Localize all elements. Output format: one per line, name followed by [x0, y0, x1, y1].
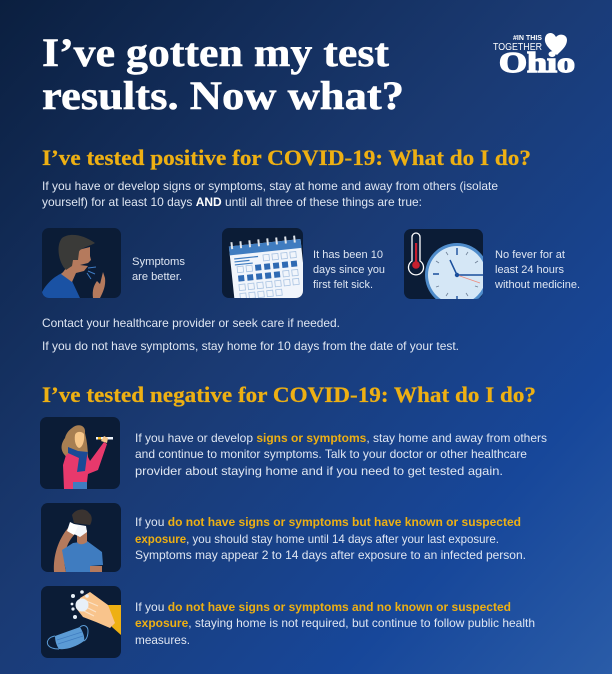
icon: person coughing	[42, 228, 121, 298]
text: negative with symptoms: provider about staying home and if you need to get tested again.	[135, 464, 503, 478]
title: I’ve gotten my test	[42, 30, 390, 75]
icon: man with mask	[41, 503, 121, 572]
intro paragraph	[42, 179, 498, 209]
text: negative no exposure: If you do not have signs or symptoms and no known or suspected	[135, 600, 511, 614]
icon: hand washing and mask	[41, 586, 121, 658]
label: ten days: days since you	[313, 264, 385, 276]
text: negative with exposure	[135, 515, 526, 562]
heading: tested positive: I’ve tested positive for COVID-19: What do I do?	[42, 145, 531, 170]
care note: Contact your healthcare provider or seek care if needed.	[42, 316, 340, 330]
no symptoms note: If you do not have symptoms, stay home for 10 days from the date of your test.	[42, 339, 459, 353]
label: symptoms better: Symptoms	[132, 256, 185, 268]
label: no fever: least 24 hours	[495, 264, 564, 276]
text: negative with symptoms	[135, 431, 547, 478]
text: negative no exposure: exposure, staying home is not required, but continue to follow public health	[135, 616, 535, 630]
intro paragraph: yourself) for at least 10 days AND until all three of these things are true:	[42, 195, 422, 209]
label: ten days	[313, 249, 385, 291]
text: negative with symptoms: and continue to monitor symptoms. Talk to your doctor or other healthcare	[135, 447, 527, 461]
icon: thermometer and clock	[404, 229, 483, 299]
text: negative with exposure: Symptoms may appear 2 to 14 days after exposure to an infected person.	[135, 548, 526, 562]
intro paragraph: If you have or develop signs or symptoms, stay at home and away from others (isolate	[42, 179, 498, 193]
heading: tested negative: I’ve tested negative for COVID-19: What do I do?	[42, 382, 536, 407]
icon: woman with thermometer	[40, 417, 120, 489]
text: negative no exposure	[135, 600, 535, 647]
logo: In This Together Ohio: TOGETHER	[493, 41, 542, 53]
label: no fever: without medicine.	[494, 279, 580, 291]
logo: In This Together Ohio	[493, 33, 575, 79]
label: no fever: No fever for at	[495, 249, 566, 261]
label: symptoms better: are better.	[132, 271, 182, 283]
logo: In This Together Ohio: #IN THIS	[513, 33, 542, 42]
title: results. Now what?	[42, 73, 404, 118]
label: symptoms better	[132, 256, 185, 283]
text: negative with symptoms: If you have or develop signs or symptoms, stay home and away from others	[135, 431, 547, 445]
text: negative no exposure: measures.	[135, 633, 190, 647]
text: negative with exposure: If you do not have signs or symptoms but have known or suspected	[135, 515, 521, 529]
logo: In This Together Ohio: Ohio	[499, 48, 575, 79]
label: ten days: It has been 10	[313, 249, 383, 261]
title	[42, 30, 404, 118]
icon: calendar	[222, 228, 303, 298]
label: no fever	[494, 249, 580, 291]
text: negative with exposure: exposure, you should stay home until 14 days after your last exposure.	[135, 532, 499, 546]
label: ten days: first felt sick.	[313, 279, 373, 291]
